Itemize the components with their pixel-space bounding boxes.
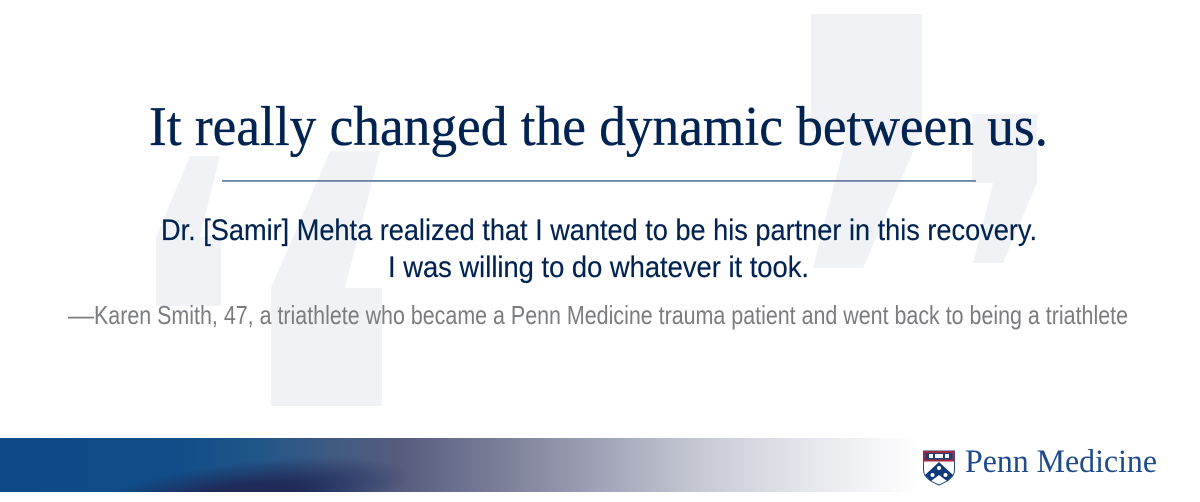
quote line 1: Dr. [Samir] Mehta realized that I wanted to be his partner in this recovery. <box>161 214 1037 247</box>
quote line 2: I was willing to do whatever it took. <box>388 251 809 284</box>
attribution dash: — <box>68 300 94 330</box>
attribution <box>68 300 1128 330</box>
icon: opening quotation mark <box>156 151 382 406</box>
divider rule <box>222 180 976 182</box>
gradient footer band <box>0 438 1200 492</box>
logo: Penn Medicine <box>924 444 1157 485</box>
icon: Penn shield <box>924 451 954 485</box>
quote text <box>161 214 1037 284</box>
title: It really changed the dynamic between us. <box>149 96 1048 158</box>
logo wordmark: Penn Medicine <box>965 444 1157 480</box>
icon: closing quotation mark <box>811 14 1037 268</box>
